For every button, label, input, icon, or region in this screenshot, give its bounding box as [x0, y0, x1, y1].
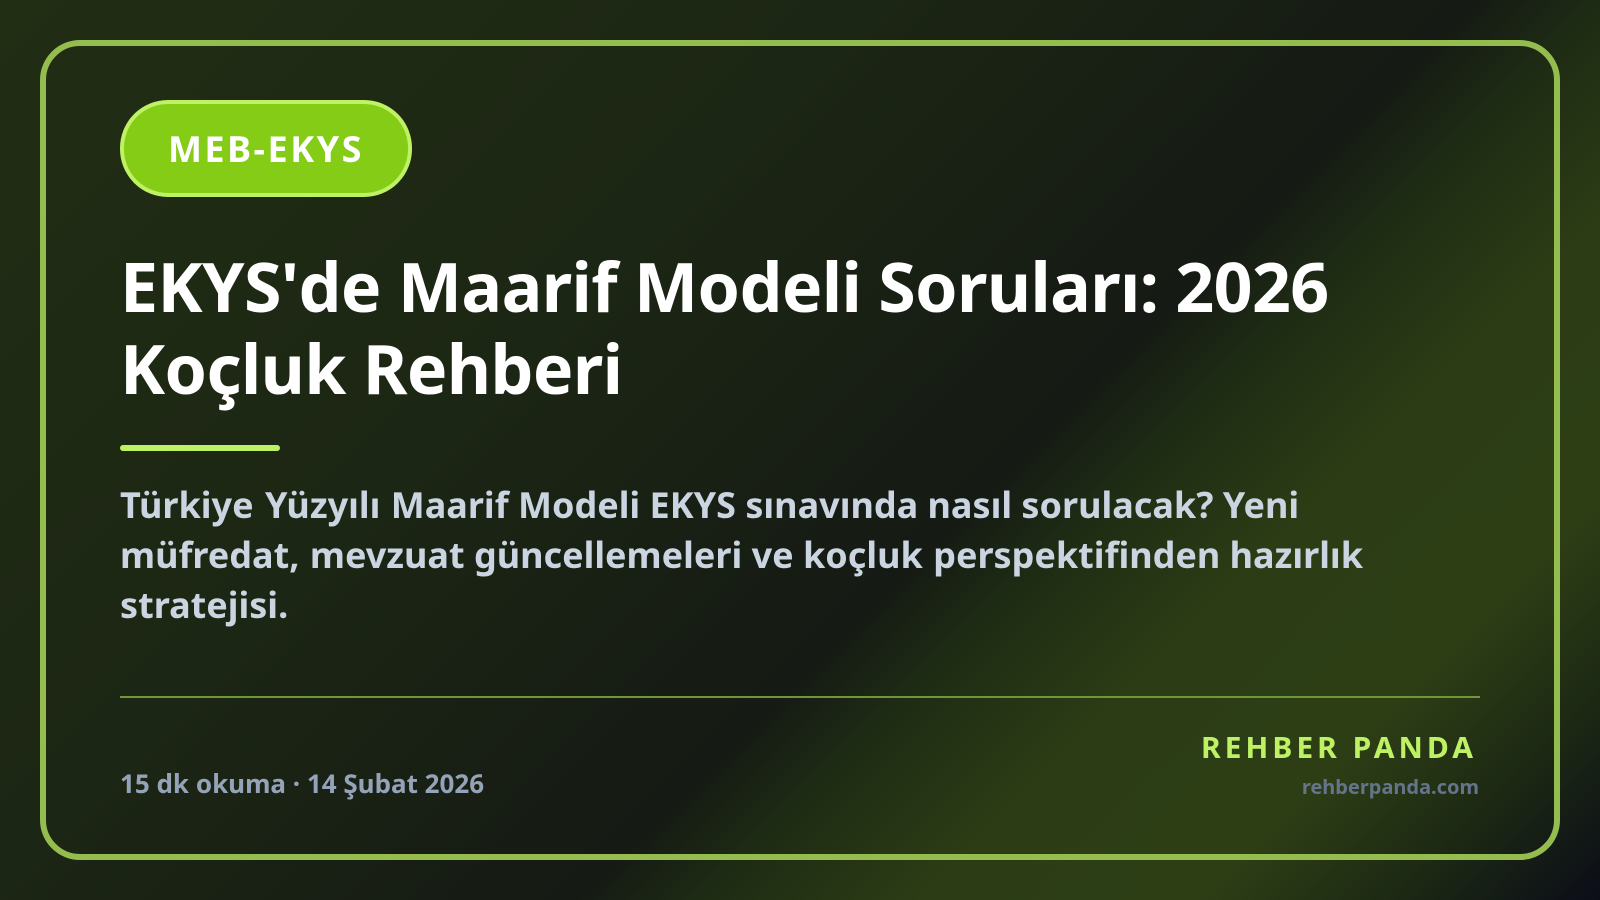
title	[120, 239, 1329, 414]
badge: MEB-EKYS: MEB-EKYS	[168, 124, 364, 173]
footer divider	[120, 696, 1480, 698]
description: müfredat, mevzuat güncellemeleri ve koçluk perspektifinden hazırlık	[120, 530, 1363, 579]
title: EKYS'de Maarif Modeli Soruları: 2026	[120, 239, 1329, 332]
badge: MEB-EKYS	[120, 100, 412, 197]
description	[120, 480, 1363, 629]
title: Koçluk Rehberi	[120, 321, 622, 414]
website url: rehberpanda.com	[1302, 773, 1479, 800]
accent bar	[120, 445, 280, 451]
brand name: REHBER PANDA	[1201, 726, 1477, 767]
meta: reading time and date: 15 dk okuma · 14 Şubat 2026	[120, 765, 484, 801]
description: stratejisi.	[120, 580, 288, 629]
description: Türkiye Yüzyılı Maarif Modeli EKYS sınavında nasıl sorulacak? Yeni	[120, 480, 1299, 529]
